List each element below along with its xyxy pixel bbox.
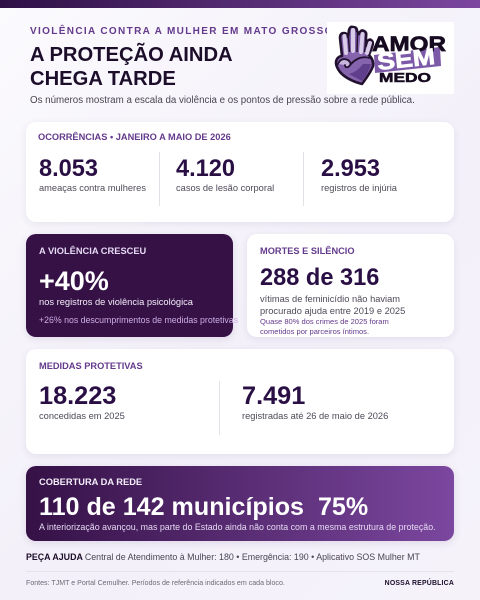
logo word: amor: AMOR xyxy=(372,33,446,56)
stat: registradas: 7.491 xyxy=(242,382,305,410)
description: procurado ajuda entre 2019 e 2025 xyxy=(260,306,405,316)
panel heading: COBERTURA DA REDE xyxy=(39,477,142,487)
big number: 110 de 142 municípios 75% xyxy=(39,493,368,521)
description: vítimas de feminicídio não haviam xyxy=(260,294,400,304)
description: A interiorização avançou, mas parte do Estado ainda não conta com a mesma estrutura de proteção. xyxy=(39,522,436,532)
stat: ameaças: 8.053 xyxy=(39,156,98,182)
stat: lesão corporal: 4.120 xyxy=(176,156,235,182)
stat: concedidas: concedidas em 2025 xyxy=(39,411,125,421)
icon: hand with heart xyxy=(336,27,373,84)
stat: lesão corporal xyxy=(176,156,274,193)
stat: concedidas: 18.223 xyxy=(39,382,116,410)
title: CHEGA TARDE xyxy=(30,68,176,90)
panel heading: MORTES E SILÊNCIO xyxy=(260,246,355,256)
logo word: sem: SEM xyxy=(376,43,436,75)
panel: mortes e silêncio xyxy=(247,234,454,337)
logo: Amor Sem Medo xyxy=(327,22,454,94)
sources: Fontes: TJMT e Portal Cemulher. Períodos de referência indicados em cada bloco. xyxy=(26,580,285,587)
panel: medidas protetivas xyxy=(26,349,454,454)
panel heading: MEDIDAS PROTETIVAS xyxy=(39,361,143,371)
secondary note xyxy=(260,317,389,336)
logo word: medo: MEDO xyxy=(379,71,431,85)
big number: +40% xyxy=(39,266,109,296)
secondary note: +26% nos descumprimentos de medidas protetivas xyxy=(39,315,238,325)
description xyxy=(260,294,405,316)
stat: registradas xyxy=(242,382,388,421)
subtitle: Os números mostram a escala da violência e os pontos de pressão sobre a rede pública. xyxy=(30,95,415,106)
stat: concedidas xyxy=(39,382,125,421)
panel: a violência cresceu xyxy=(26,234,233,337)
eyebrow heading: VIOLÊNCIA CONTRA A MULHER EM MATO GROSSO xyxy=(30,26,334,37)
brand: NOSSA REPÚBLICA xyxy=(385,580,454,587)
stat: ameaças xyxy=(39,156,146,193)
panel: ocorrências xyxy=(26,122,454,222)
help line: PEÇA AJUDACentral de Atendimento à Mulher: 180 • Emergência: 190 • Aplicativo SOS Mulher MT xyxy=(26,552,420,562)
stat: ameaças: ameaças contra mulheres xyxy=(39,183,146,193)
description: nos registros de violência psicológica xyxy=(39,297,193,307)
title: A PROTEÇÃO AINDA xyxy=(30,44,233,66)
stat: injúria: registros de injúria xyxy=(321,183,397,193)
panel heading: A VIOLÊNCIA CRESCEU xyxy=(39,246,146,256)
top gradient bar xyxy=(0,0,480,8)
panel heading: OCORRÊNCIAS • JANEIRO A MAIO DE 2026 xyxy=(38,132,231,142)
secondary note: Quase 80% dos crimes de 2025 foram xyxy=(260,317,389,326)
logo panel: sem xyxy=(374,47,441,73)
secondary note: cometidos por parceiros íntimos. xyxy=(260,327,369,336)
stat: injúria xyxy=(321,156,397,193)
stat: injúria: 2.953 xyxy=(321,156,380,182)
big number: 288 de 316 xyxy=(260,265,379,291)
stat: lesão corporal: casos de lesão corporal xyxy=(176,183,274,193)
stat: registradas: registradas até 26 de maio de 2026 xyxy=(242,411,388,421)
panel: cobertura da rede xyxy=(26,466,454,541)
title xyxy=(30,42,233,90)
